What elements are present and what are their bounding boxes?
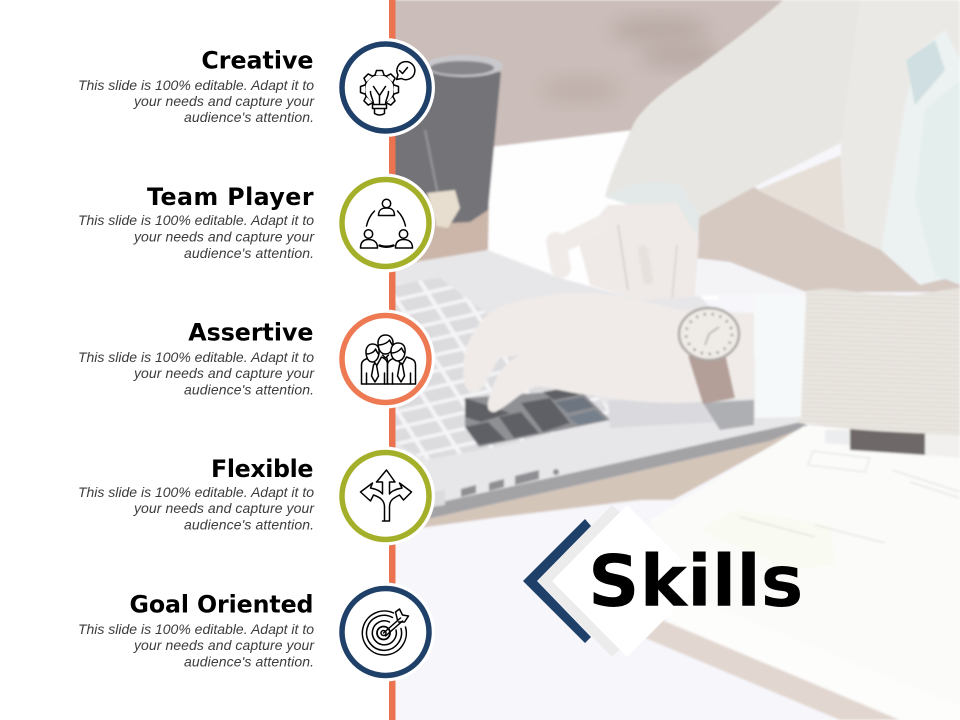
left white panel bbox=[0, 0, 389, 720]
icon: three-way direction arrows bbox=[360, 470, 412, 521]
icon: target with arrow bbox=[362, 609, 408, 655]
laptop ports bbox=[461, 469, 559, 497]
description: Team Player: audience's attention. bbox=[184, 245, 314, 261]
item: Flexible bbox=[78, 446, 435, 546]
title: Skills bbox=[588, 540, 803, 623]
node: Team Player circle bbox=[336, 174, 435, 272]
wood table bbox=[390, 426, 808, 532]
cardigan sleeve bbox=[605, 0, 906, 250]
description: Creative: audience's attention. bbox=[184, 109, 314, 125]
watch strap bbox=[688, 353, 735, 404]
node: Goal Oriented circle bbox=[336, 582, 435, 682]
description: Team Player: your needs and capture your bbox=[133, 228, 315, 244]
background photo: hands typing on a laptop bbox=[390, 0, 960, 720]
node: Creative circle bbox=[336, 38, 435, 137]
description: Goal Oriented: audience's attention. bbox=[184, 654, 314, 670]
navy chevron bbox=[523, 519, 591, 643]
icon: gear with light bulb and speech bubble bbox=[360, 62, 415, 115]
item: Creative bbox=[78, 38, 435, 137]
node: Assertive circle bbox=[336, 310, 435, 408]
heading: Creative: Creative bbox=[201, 46, 314, 74]
description: Team Player: This slide is 100% editable. Adapt it to bbox=[78, 212, 314, 228]
description: Assertive: your needs and capture your bbox=[133, 365, 315, 381]
description: Goal Oriented: This slide is 100% editable. Adapt it to bbox=[78, 621, 314, 637]
white diamond bbox=[552, 505, 703, 657]
description: Goal Oriented: your needs and capture your bbox=[133, 637, 315, 653]
grey diamond bbox=[538, 505, 690, 657]
item: Team Player bbox=[78, 174, 435, 272]
description: Flexible: audience's attention. bbox=[184, 516, 314, 532]
description: Creative: This slide is 100% editable. Adapt it to bbox=[78, 77, 314, 93]
description: Assertive: audience's attention. bbox=[184, 382, 314, 398]
paper bbox=[650, 426, 960, 720]
item: Goal Oriented bbox=[78, 582, 435, 682]
description: Flexible: your needs and capture your bbox=[133, 500, 315, 516]
node: Flexible circle bbox=[336, 446, 435, 546]
main hand bbox=[463, 292, 754, 412]
heading: Team Player: Team Player bbox=[147, 183, 314, 211]
pen bbox=[825, 430, 850, 445]
laptop deck bbox=[390, 250, 806, 512]
vertical orange timeline bar bbox=[389, 0, 396, 720]
icon: group of business people bbox=[362, 335, 416, 384]
item: Assertive bbox=[78, 310, 435, 408]
heading: Assertive: Assertive bbox=[188, 318, 314, 346]
sweater cuff bbox=[799, 288, 960, 435]
watch face bbox=[679, 308, 739, 360]
description: Flexible: This slide is 100% editable. Adapt it to bbox=[78, 484, 314, 500]
heading: Flexible: Flexible bbox=[211, 455, 314, 483]
title block: Skills bbox=[523, 505, 803, 657]
upper hand fingers bbox=[578, 203, 699, 305]
laptop edge shadow bbox=[390, 422, 808, 526]
icon: three people in a cycle bbox=[360, 199, 412, 248]
description: Creative: your needs and capture your bbox=[133, 93, 315, 109]
description: Assertive: This slide is 100% editable. Adapt it to bbox=[78, 349, 314, 365]
mug bbox=[390, 62, 501, 226]
heading: Goal Oriented: Goal Oriented bbox=[130, 590, 314, 618]
dark keys bbox=[465, 390, 610, 447]
